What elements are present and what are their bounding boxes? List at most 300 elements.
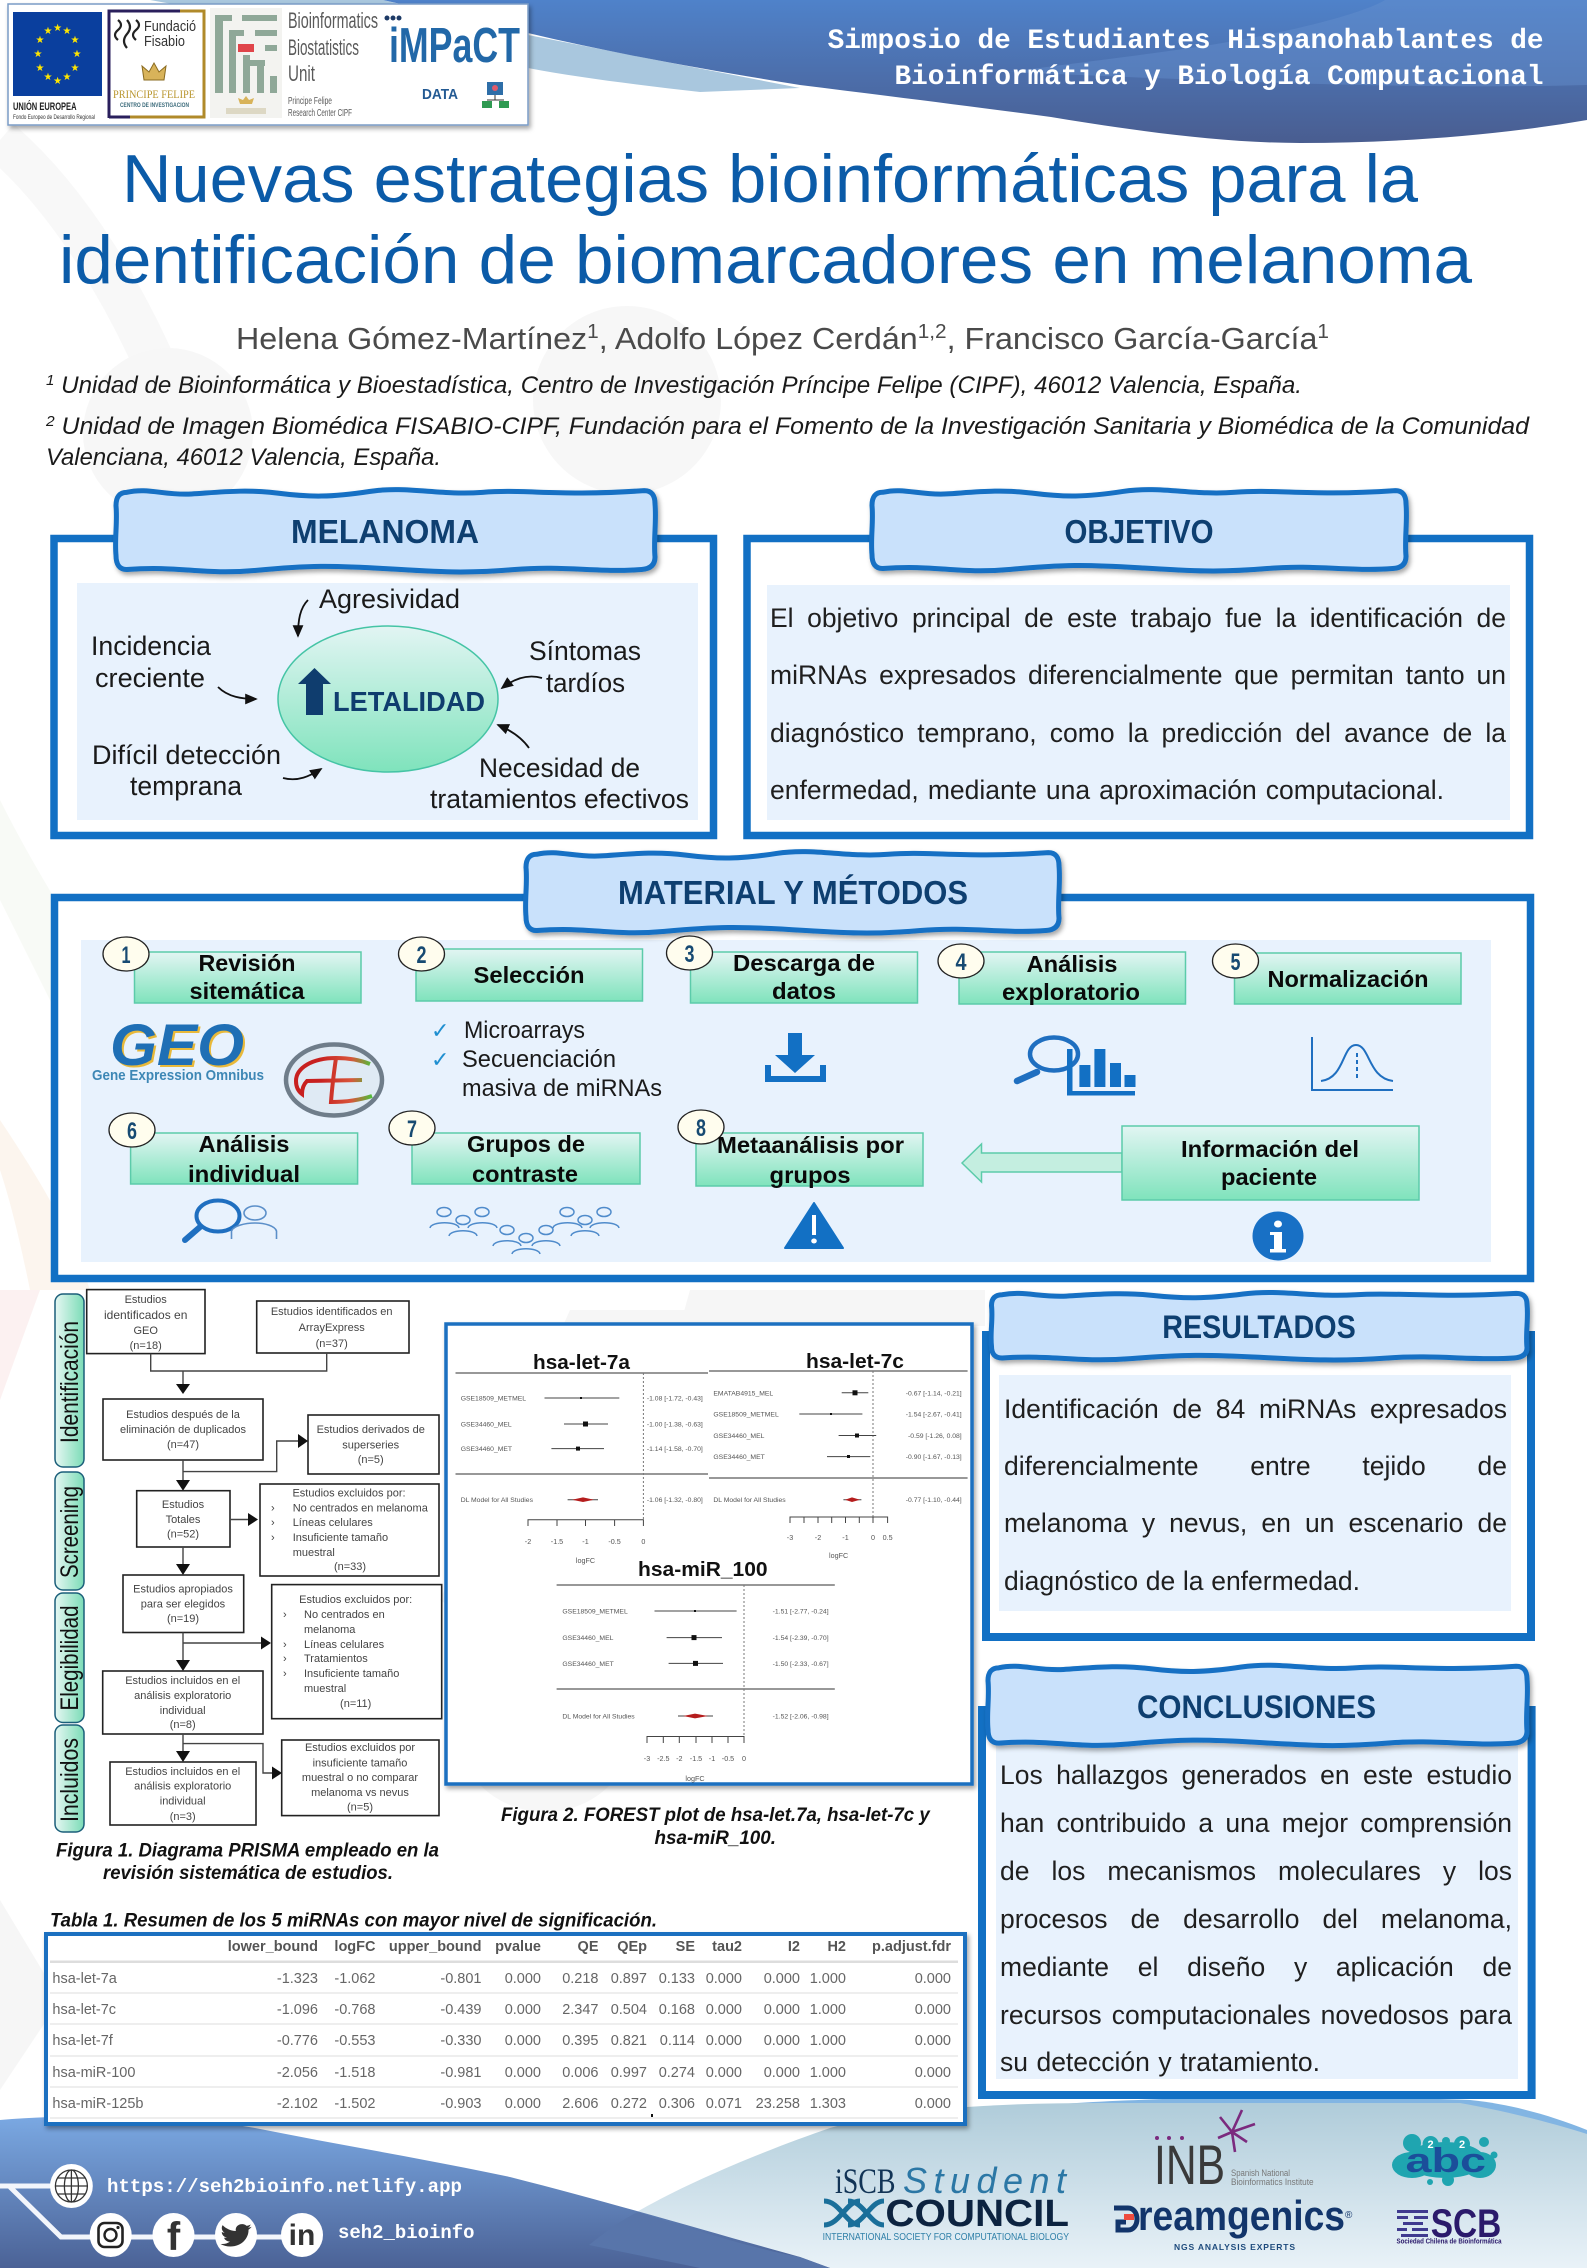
text: conclusiones: procesos de desarrollo del melanoma, [1000, 1904, 1512, 1934]
flow boxes: (n=33) [334, 1561, 366, 1573]
banner: material y métodos [526, 852, 1059, 933]
list: selection criteria: masiva de miRNAs [462, 1075, 662, 1102]
text: resultados: Identificación de 84 miRNAs expresados [1004, 1394, 1507, 1424]
icon: GEO logo: GEO [110, 1013, 244, 1078]
table row: hsa-miR-100: 0.000 [915, 2065, 951, 2081]
forest plot: hsa-miR_100: GSE34460_MEL [562, 1635, 614, 1642]
logo: EU flag: ★ [36, 35, 45, 46]
list: selection criteria: ✓ [431, 1018, 449, 1043]
table row: hsa-let-7c: 0.000 [915, 2002, 951, 2018]
step 3: descarga de datos: Descarga de [733, 950, 875, 976]
box: información del paciente: paciente [1221, 1164, 1317, 1190]
table row: hsa-let-7c: 0.168 [659, 2002, 695, 2018]
forest plot: hsa-miR_100: hsa-miR_100 [638, 1558, 768, 1581]
table row: hsa-let-7f: -0.776 [277, 2033, 318, 2049]
text: objetivo: miRNAs expresados diferencialmente que permitan tanto un [770, 660, 1506, 690]
flow boxes: Estudios [162, 1499, 205, 1511]
step 5: normalización [1212, 944, 1461, 1004]
table row: hsa-let-7f: -0.330 [440, 2033, 482, 2049]
flow boxes [87, 1290, 442, 1825]
icon: linkedin: in [289, 2219, 315, 2252]
step 3: descarga de datos: datos [772, 978, 836, 1004]
text: conclusiones: mediante el diseño y aplicación de [1000, 1952, 1512, 1982]
forest plot: hsa-let-7c: -1.54 [-2.67, -0.41] [906, 1412, 962, 1418]
flow boxes: muestral o no comparar [302, 1772, 418, 1784]
diagram: letalidad: tardíos [546, 668, 625, 698]
diagram: letalidad: temprana [130, 771, 243, 801]
step 2: selección [398, 937, 642, 1001]
logo: INB: INB [1154, 2133, 1225, 2196]
diagram: letalidad: creciente [95, 663, 205, 693]
forest plot: hsa-miR_100: -1.50 [-2.33, -0.67] [773, 1661, 829, 1668]
forest plot: hsa-miR_100: -1.51 [-2.77, -0.24] [773, 1608, 829, 1616]
flow boxes: Insuficiente tamaño [304, 1668, 399, 1680]
flow boxes: identificados en [104, 1308, 187, 1322]
panel: objetivo [747, 490, 1530, 836]
forest plot: hsa-let-7a: -1.14 [-1.58, -0.70] [647, 1446, 703, 1453]
logo: EU flag [13, 12, 102, 121]
step 4: análisis exploratorio: exploratorio [1002, 979, 1140, 1005]
forest plot: hsa-let-7c: logFC [829, 1551, 848, 1560]
table row: hsa-let-7f: 1.000 [810, 2033, 846, 2049]
table row: hsa-let-7a: 0.000 [764, 1971, 800, 1987]
table header: QE [578, 1939, 599, 1955]
logo: EU flag: ★ [53, 23, 62, 34]
table row: hsa-miR-100: -0.981 [440, 2065, 482, 2081]
authors: 1,2 [918, 321, 947, 343]
step 1: revisión sistemática: sitemática [190, 978, 305, 1004]
forest plot: hsa-miR_100: logFC [685, 1774, 705, 1783]
forest plot: hsa-miR_100: -1 [709, 1754, 715, 1763]
caption: figura 2: hsa-miR_100. [654, 1828, 776, 1849]
diagram: letalidad: Necesidad de [479, 753, 640, 783]
affiliations: 2 [45, 413, 55, 430]
affiliations: Unidad de Imagen Biomédica FISABIO-CIPF, Fundación para el Fomento de la Investigación Sanitaria y Biomédica de la Comunidad [55, 413, 1530, 440]
list: selection criteria: Secuenciación [462, 1046, 616, 1073]
forest plot: hsa-let-7a: -1.5 [551, 1537, 563, 1546]
phase labels: Incluidos [56, 1738, 84, 1822]
panel: material y métodos [54, 852, 1530, 1278]
text: conclusiones [1000, 1752, 1512, 2092]
heading: objetivo: OBJETIVO [1064, 513, 1214, 550]
authors: , Francisco García-García [947, 321, 1318, 356]
forest plot: hsa-miR_100: -0.5 [722, 1754, 734, 1763]
table row: hsa-miR-100 [52, 2065, 951, 2081]
forest plot: hsa-let-7c: -0.90 [-1.67, -0.13] [906, 1454, 962, 1461]
table row: hsa-miR-100: 0.006 [562, 2065, 598, 2081]
forest plot: hsa-let-7a: DL Model for All Studies [461, 1497, 534, 1504]
forest plot: hsa-miR_100 [557, 1558, 835, 1783]
diagram: letalidad: LETALIDAD [333, 686, 485, 717]
phase labels: Elegibilidad [56, 1606, 84, 1710]
table row: hsa-miR-125b: 1.303 [810, 2096, 846, 2112]
table row: hsa-miR-125b [52, 2096, 951, 2112]
logo: Dreamgenics [1114, 2192, 1353, 2252]
logo: Dreamgenics: NGS ANALYSIS EXPERTS [1174, 2242, 1295, 2252]
affiliations: Unidad de Bioinformática y Bioestadística, Centro de Investigación Príncipe Felipe (CIPF), 46012 Valencia, España. [54, 372, 1302, 399]
symposium title [828, 26, 1544, 93]
table row: hsa-let-7f: 0.000 [764, 2033, 800, 2049]
logo: Dreamgenics: ® [1345, 2210, 1353, 2221]
table row: hsa-let-7c: hsa-let-7c [52, 2002, 116, 2018]
step 8: metaanálisis por grupos: Metaanálisis por [717, 1132, 904, 1158]
forest plot: hsa-let-7a: GSE34460_MET [461, 1446, 512, 1453]
icon: information [1252, 1212, 1304, 1260]
flow boxes: análisis exploratorio [134, 1690, 231, 1702]
authors: 1 [587, 321, 599, 343]
flow boxes: Estudios después de la [126, 1409, 241, 1421]
logo: ISCB Student Council: COUNCIL [885, 2193, 1069, 2235]
flow boxes: No centrados en melanoma [293, 1502, 429, 1514]
table row: hsa-let-7f: 0.821 [611, 2033, 647, 2049]
table row: hsa-miR-100: 0.000 [505, 2065, 541, 2081]
forest plot: hsa-let-7a: GSE18509_METMEL [461, 1396, 526, 1402]
forest plot: hsa-miR_100: -1.54 [-2.39, -0.70] [773, 1635, 829, 1642]
step 3: descarga de datos [666, 936, 918, 1004]
table row: hsa-let-7a: 0.000 [706, 1971, 742, 1987]
logo: ABC 2022: 2 [1459, 2139, 1465, 2151]
text: social handle: seh2_bioinfo [338, 2222, 474, 2244]
diagram: letalidad: Incidencia [91, 631, 212, 661]
figure 2: forest plots [446, 1324, 972, 1849]
flow boxes: análisis exploratorio [134, 1781, 231, 1793]
icon: globe [50, 2164, 93, 2208]
flow boxes: melanoma vs nevus [311, 1787, 409, 1799]
table row: hsa-let-7a: 0.000 [505, 1971, 541, 1987]
icon: download [765, 1033, 826, 1082]
box: información del paciente: Información del [1181, 1136, 1359, 1162]
icon: instagram [90, 2213, 132, 2257]
table row: hsa-let-7a: -1.062 [334, 1971, 376, 1987]
flow boxes: ArrayExpress [299, 1322, 365, 1334]
flow boxes: para ser elegidos [141, 1599, 226, 1611]
flow boxes: Insuficiente tamaño [293, 1532, 388, 1544]
flow boxes: (n=5) [347, 1802, 373, 1814]
forest plot: hsa-let-7a: -1.08 [-1.72, -0.43] [647, 1396, 703, 1402]
table row: hsa-let-7c [52, 2002, 951, 2018]
authors: , Adolfo López Cerdán [599, 321, 918, 356]
flow boxes: (n=18) [130, 1340, 162, 1352]
table row: hsa-let-7f: -0.553 [334, 2033, 376, 2049]
logo: SCB: Sociedad Chilena de Bioinformática [1396, 2236, 1502, 2246]
text: objetivo: enfermedad, mediante una aproximación computacional. [770, 775, 1444, 805]
heading: resultados: RESULTADOS [1162, 1309, 1356, 1345]
table header: logFC [334, 1939, 376, 1955]
table: top 5 miRNAs [46, 1934, 965, 2124]
step 8: metaanálisis por grupos [678, 1110, 923, 1188]
step 4: análisis exploratorio: Análisis [1026, 951, 1118, 977]
panel: conclusiones [982, 1665, 1532, 2095]
forest plot: hsa-let-7a: -1.00 [-1.38, -0.63] [647, 1422, 703, 1428]
table row: hsa-let-7c: 0.000 [505, 2002, 541, 2018]
arrow: patient information to meta-analysis [962, 1144, 1122, 1182]
flow boxes: (n=37) [316, 1338, 348, 1350]
table row: hsa-miR-125b: 0.306 [659, 2096, 695, 2112]
table row: hsa-miR-100: -2.056 [277, 2065, 318, 2081]
forest plot: hsa-let-7a: logFC [576, 1556, 595, 1565]
step 2: selección: Selección [474, 962, 584, 988]
forest plot: hsa-let-7a: -0.5 [608, 1537, 621, 1546]
table row: hsa-miR-125b: 0.000 [915, 2096, 951, 2112]
table row: hsa-let-7a [52, 1971, 951, 1987]
flow boxes: Estudios excluidos por: [299, 1594, 412, 1606]
forest plot: hsa-let-7c: 0 [871, 1533, 875, 1542]
forest plot: hsa-miR_100: GSE34460_MET [562, 1661, 614, 1668]
flow boxes: Estudios identificados en [271, 1306, 393, 1318]
flow boxes: (n=47) [167, 1439, 199, 1451]
icon: contrast groups [430, 1208, 619, 1254]
forest plot: hsa-let-7c: 0.5 [883, 1533, 893, 1542]
icon: facebook [152, 2213, 194, 2259]
forest plot: hsa-let-7c: -0.67 [-1.14, -0.21] [906, 1390, 962, 1397]
table header: lower_bound [228, 1939, 318, 1955]
flow boxes: Estudios incluidos en el [125, 1766, 240, 1778]
step 4: análisis exploratorio: 4 [956, 949, 967, 976]
logo: SCB [1396, 2202, 1502, 2246]
table header: pvalue [495, 1939, 541, 1955]
heading: conclusiones: CONCLUSIONES [1137, 1689, 1376, 1725]
logo: INB: Bioinformatics Institute [1231, 2177, 1314, 2187]
caption: figura 2 [501, 1805, 931, 1849]
flow boxes: Estudios [125, 1294, 167, 1306]
forest plot: hsa-miR_100: -2.5 [657, 1754, 669, 1763]
icon: normal distribution [1312, 1037, 1393, 1090]
flow boxes: individual [160, 1796, 206, 1808]
list: selection criteria: ✓ [431, 1047, 449, 1072]
table row: hsa-let-7f: 0.395 [562, 2033, 598, 2049]
flow boxes: No centrados en [304, 1609, 385, 1621]
step 6: análisis individual: 6 [127, 1118, 137, 1145]
forest plot: hsa-let-7c: -3 [787, 1533, 793, 1542]
list: selection criteria [431, 1017, 662, 1102]
table row: hsa-let-7a: 0.000 [915, 1971, 951, 1987]
logo: Bioinformatics Biostatistics Unit: Biostatistics [288, 35, 359, 60]
table header: tau2 [712, 1939, 742, 1955]
table header: upper_bound [389, 1939, 482, 1955]
table row: hsa-let-7a: 0.133 [659, 1971, 695, 1987]
logo: Fundació Fisabio: CENTRO DE INVESTIGACION [120, 102, 189, 109]
icon: linkedin [281, 2213, 323, 2257]
phase labels: Identificación [56, 1321, 84, 1443]
title: identificación de biomarcadores en melanoma [59, 222, 1472, 298]
flow boxes: (n=8) [170, 1719, 196, 1731]
flow boxes: muestral [293, 1547, 335, 1559]
text: resultados: melanoma y nevus, en un escenario de [1004, 1508, 1507, 1538]
logo: INB [1154, 2110, 1314, 2196]
forest plot: hsa-let-7c [709, 1350, 968, 1560]
forest plot: hsa-let-7a: -1 [582, 1537, 589, 1546]
flow boxes: › [283, 1609, 287, 1621]
table row: hsa-let-7c: 1.000 [810, 2002, 846, 2018]
step 6: análisis individual [109, 1113, 358, 1187]
flow boxes: melanoma [304, 1624, 356, 1636]
table row: hsa-miR-125b: 0.272 [611, 2096, 647, 2112]
flow boxes: (n=5) [358, 1454, 384, 1466]
logo: Bioinformatics Biostatistics Unit: Unit [288, 61, 315, 86]
panel: resultados [986, 1293, 1531, 1637]
authors [236, 321, 1329, 356]
icon: GEO logo: Gene Expression Omnibus [92, 1067, 264, 1084]
banner: objetivo [872, 490, 1406, 571]
forest plot: hsa-let-7c: DL Model for All Studies [713, 1497, 786, 1504]
table header: SE [676, 1939, 695, 1955]
table row: hsa-let-7f: 0.000 [505, 2033, 541, 2049]
table header: p.adjust.fdr [872, 1939, 951, 1955]
authors: Helena Gómez-Martínez [236, 321, 574, 356]
table row: hsa-let-7a: hsa-let-7a [52, 1971, 118, 1987]
footer contact links [0, 2164, 474, 2259]
table row: hsa-let-7c: -0.768 [334, 2002, 376, 2018]
table row: hsa-let-7f [52, 2033, 951, 2049]
footer background [0, 2097, 1587, 2268]
diagram: letalidad: Agresividad [319, 584, 460, 614]
logo: Bioinformatics Biostatistics Unit: Principe Felipe [288, 96, 332, 107]
caption: tabla 1: Tabla 1. Resumen de los 5 miRNAs con mayor nivel de significación. [50, 1911, 657, 1932]
forest plot: hsa-let-7c: GSE34460_MEL [713, 1433, 765, 1440]
icon: twitter [215, 2213, 257, 2257]
logo: iMPaCT Data [384, 16, 520, 108]
logo: ISCB Student Council [823, 2160, 1069, 2243]
flow boxes: (n=11) [340, 1698, 371, 1710]
flow boxes: › [283, 1639, 287, 1651]
text: objetivo [770, 590, 1506, 822]
step 1: revisión sistemática [103, 937, 361, 1004]
title [59, 141, 1472, 298]
step 7: grupos de contraste: Grupos de [467, 1131, 585, 1157]
logo: ISCB Student Council: iSCB [835, 2161, 896, 2201]
logo: Fundació Fisabio: Fundació [144, 18, 196, 35]
logo: EU flag: ★ [73, 49, 82, 60]
logo: EU flag: ★ [53, 76, 62, 87]
flow boxes: (n=3) [170, 1811, 196, 1823]
diagram: letalidad: Difícil detección [92, 740, 281, 770]
table header: H2 [827, 1939, 846, 1955]
step 7: grupos de contraste: 7 [407, 1116, 417, 1143]
table row: hsa-let-7a: -0.801 [440, 1971, 482, 1987]
forest plot: hsa-let-7a [456, 1351, 708, 1565]
table row: hsa-let-7a: 1.000 [810, 1971, 846, 1987]
authors: 1 [1317, 321, 1329, 343]
flow boxes: Tratamientos [304, 1653, 368, 1665]
forest plot: hsa-let-7c: GSE18509_METMEL [713, 1412, 779, 1418]
table row: hsa-miR-125b: hsa-miR-125b [52, 2096, 143, 2112]
flow boxes: insuficiente tamaño [313, 1758, 407, 1770]
flow boxes: › [283, 1668, 287, 1680]
table row: hsa-miR-100: 1.000 [810, 2065, 846, 2081]
forest plot: hsa-let-7c: -0.59 [-1.26, 0.08] [908, 1433, 962, 1440]
box: información del paciente [1122, 1126, 1419, 1200]
table row: hsa-let-7f: 0.000 [915, 2033, 951, 2049]
logo: EU flag: ★ [44, 26, 53, 37]
icon: GEO logo: GEO [112, 1015, 246, 1080]
logo: Fundació Fisabio: Fisabio [144, 33, 185, 50]
table row: hsa-miR-100: 0.997 [611, 2065, 647, 2081]
step 7: grupos de contraste: contraste [472, 1161, 578, 1187]
forest plot: hsa-miR_100: 0 [742, 1754, 746, 1763]
icon: ArrayExpress logo [286, 1044, 382, 1116]
flow boxes: Estudios incluidos en el [125, 1675, 240, 1687]
flow boxes: Líneas celulares [293, 1517, 373, 1529]
text: resultados: diagnóstico de la enfermedad. [1004, 1566, 1360, 1596]
flow boxes: Estudios excluidos por: [292, 1488, 406, 1500]
table row: hsa-let-7c: 0.000 [764, 2002, 800, 2018]
step 4: análisis exploratorio [938, 944, 1186, 1005]
caption: figura 1: Figura 1. Diagrama PRISMA empleado en la [56, 1840, 439, 1862]
table row: hsa-let-7a: 0.897 [611, 1971, 647, 1987]
panel: melanoma [54, 490, 714, 836]
table row: hsa-let-7c: 0.504 [611, 2002, 647, 2018]
caption: figura 1 [56, 1840, 439, 1884]
title: Nuevas estrategias bioinformáticas para la [122, 141, 1418, 217]
table row: hsa-miR-100: -1.518 [334, 2065, 376, 2081]
flow boxes: Estudios derivados de [317, 1424, 425, 1436]
step 1: revisión sistemática: 1 [122, 942, 130, 969]
forest plot: hsa-miR_100: DL Model for All Studies [562, 1714, 635, 1720]
logo: EU flag: UNIÓN EUROPEA [13, 100, 77, 113]
table row: hsa-let-7c: -0.439 [440, 2002, 482, 2018]
logo: ISCB Student Council: Student [903, 2160, 1068, 2201]
table row: hsa-miR-125b: 0.000 [505, 2096, 541, 2112]
affiliations: Valenciana, 46012 Valencia, España. [46, 444, 441, 471]
logo: EU flag: ★ [44, 72, 53, 83]
flow boxes: › [271, 1502, 275, 1514]
flow boxes: Estudios apropiados [133, 1584, 233, 1596]
step 2: selección: 2 [416, 942, 426, 969]
symposium title: Bioinformática y Biología Computacional [894, 62, 1544, 93]
figure 1: PRISMA diagram [55, 1290, 442, 1884]
flow boxes: eliminación de duplicados [120, 1424, 246, 1436]
text: resultados: diferencialmente entre tejido de [1004, 1451, 1507, 1481]
text: resultados [1004, 1381, 1507, 1613]
phase labels: Screening [56, 1486, 84, 1578]
table row: hsa-miR-125b: -0.903 [440, 2096, 482, 2112]
forest plot: hsa-let-7a: hsa-let-7a [533, 1351, 631, 1374]
caption: figura 2: Figura 2. FOREST plot de hsa-let.7a, hsa-let-7c y [501, 1805, 931, 1826]
phase labels [55, 1294, 84, 1832]
logo: EU flag: ★ [36, 63, 45, 74]
logo: Bioinformatics Biostatistics Unit: Bioinformatics [288, 8, 378, 33]
flow boxes: muestral [304, 1683, 346, 1695]
flow boxes: Líneas celulares [304, 1639, 385, 1651]
logo strip [8, 4, 528, 125]
table row: hsa-let-7f: 0.000 [706, 2033, 742, 2049]
logo: iMPaCT Data: DATA [422, 86, 458, 103]
table row: hsa-miR-125b: -1.502 [334, 2096, 376, 2112]
logo: SCB: SCB [1431, 2202, 1501, 2246]
text: conclusiones: Los hallazgos generados en este estudio [1000, 1760, 1512, 1790]
step 1: revisión sistemática: Revisión [198, 950, 296, 976]
step 3: descarga de datos: 3 [684, 941, 694, 968]
icon: magnifier and person [185, 1200, 276, 1240]
table row: hsa-miR-100: hsa-miR-100 [52, 2065, 135, 2081]
flow boxes: Estudios excluidos por [305, 1742, 415, 1754]
caption: figura 1: revisión sistemática de estudios. [103, 1863, 393, 1884]
flow boxes: individual [160, 1705, 206, 1717]
logo: Fundació Fisabio [108, 10, 205, 118]
text: conclusiones: su detección y tratamiento. [1000, 2047, 1320, 2077]
banner: resultados [991, 1293, 1527, 1360]
logo: Dreamgenics: reamgenics [1138, 2192, 1345, 2239]
text: conclusiones: de los mecanismos moleculares y los [1000, 1856, 1512, 1886]
table row: hsa-miR-100: 0.274 [659, 2065, 695, 2081]
icon: GEO logo [92, 1013, 264, 1084]
table row: hsa-miR-100: 0.000 [764, 2065, 800, 2081]
table row: hsa-let-7c: -1.096 [277, 2002, 318, 2018]
flow boxes: › [271, 1532, 275, 1544]
forest plot: hsa-let-7a: -1.06 [-1.32, -0.80] [647, 1497, 703, 1504]
table row: hsa-let-7a: -1.323 [277, 1971, 318, 1987]
logo: ABC 2022: abc [1406, 2142, 1486, 2180]
